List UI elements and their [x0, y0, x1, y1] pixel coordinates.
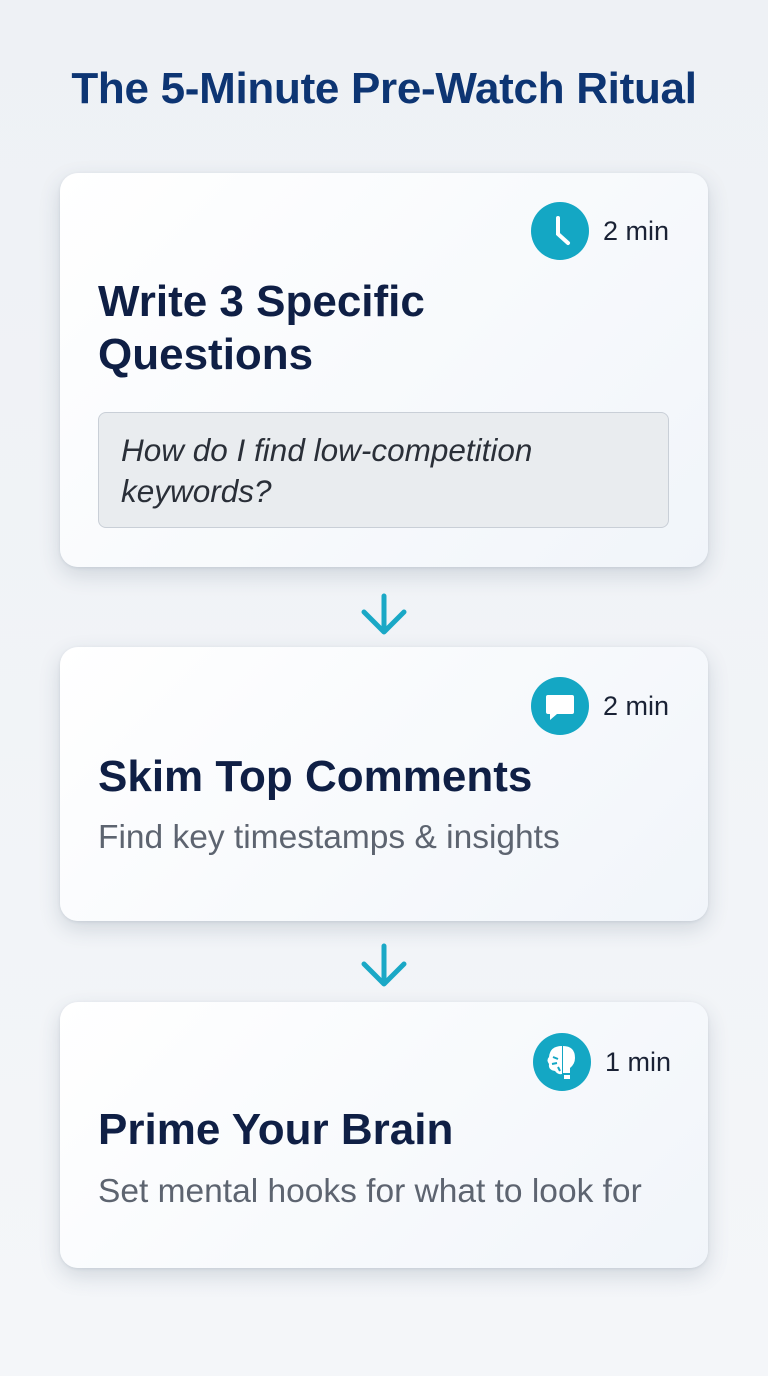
badge: 2 min clock: 2 min: [603, 216, 669, 246]
heading: Questions: [98, 330, 313, 379]
heading: Prime Your Brain: [98, 1105, 453, 1154]
badge: 2 min chat: [531, 677, 669, 735]
badge: 2 min clock: [531, 202, 669, 260]
heading: [98, 277, 425, 379]
subtitle: Set mental hooks for what to look for: [98, 1173, 642, 1210]
arrow 2: [362, 944, 406, 986]
badge: 2 min chat: 2 min: [603, 690, 669, 720]
panel: step 3: [60, 1002, 708, 1268]
panel: step 1: [60, 173, 708, 567]
heading: Skim Top Comments: [98, 752, 532, 801]
badge: 1 min brain bulb: [533, 1033, 671, 1091]
question box: How do I find low-competition keywords?: [121, 432, 532, 509]
arrow 1: [362, 594, 406, 634]
title: The 5-Minute Pre-Watch Ritual: [71, 64, 697, 113]
heading: Write 3 Specific: [98, 277, 425, 326]
subtitle: Find key timestamps & insights: [98, 819, 560, 856]
badge: 1 min brain bulb: 1 min: [605, 1046, 671, 1076]
question box: [98, 412, 669, 528]
panel: step 2: [60, 647, 708, 921]
